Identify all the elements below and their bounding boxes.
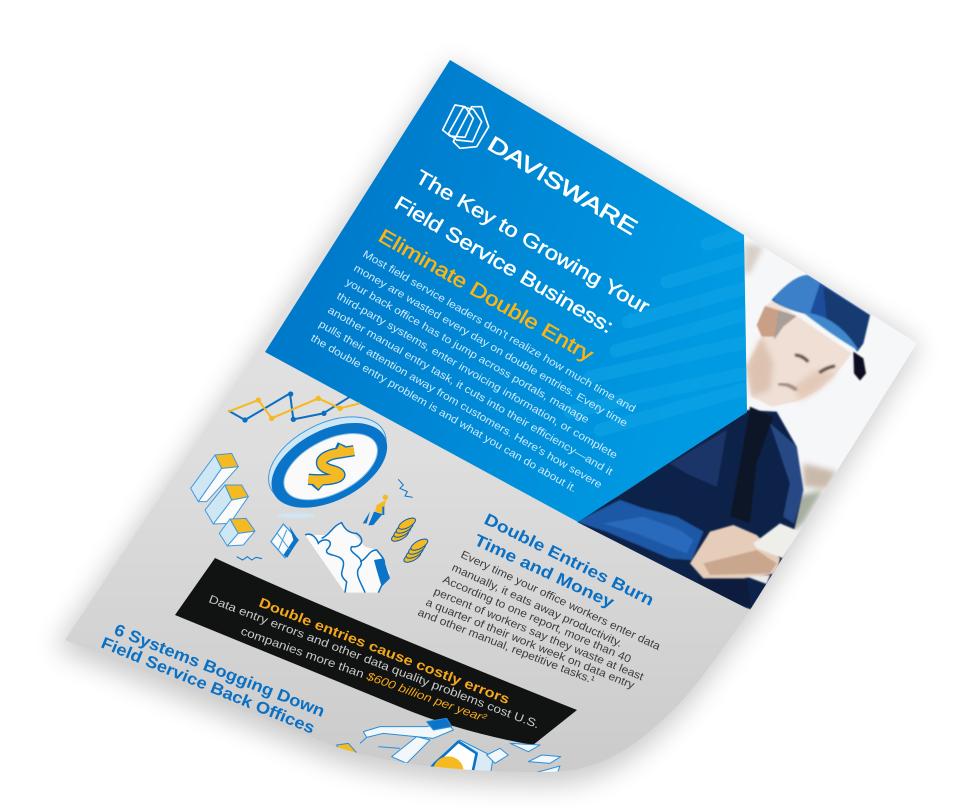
intro paragraph: money are wasted every day on double entries. Every time — [352, 262, 630, 430]
diamond icon — [271, 524, 298, 558]
section body: a quarter of their work week on data entry — [424, 597, 637, 692]
callout: costly errors: companies more than $600 billion per year² — [239, 626, 489, 725]
callout: costly errors — [175, 558, 577, 745]
blue header panel — [265, 60, 760, 522]
wave mountains — [305, 523, 390, 593]
line chart — [228, 391, 360, 423]
face — [746, 300, 852, 407]
title: Eliminate Double Entry — [374, 225, 597, 366]
section body: According to one report, more than 40 — [441, 574, 633, 666]
squiggles — [237, 479, 413, 560]
shadow under coin — [277, 513, 315, 518]
section body: percent of workers say they waste at least — [432, 586, 645, 683]
title: Field Service Business: — [390, 192, 617, 338]
callout: costly errors: Double entries cause costly errors — [257, 595, 512, 707]
section body — [416, 549, 663, 692]
illustration: back office systems — [336, 718, 562, 772]
sheet: document page — [65, 60, 930, 787]
intro paragraph: Most field service leaders don't realize how much time and — [360, 248, 638, 415]
section: double entries burn time and money — [416, 510, 663, 692]
intro paragraph: another manual entry task, it cuts into their efficiency—and it — [326, 304, 615, 478]
wordmark: DAVISWARE — [483, 132, 642, 240]
heading: 6 systems: 6 Systems Bogging Down — [112, 621, 327, 721]
section heading: Double Entries Burn — [481, 510, 657, 610]
intro paragraph: your back office has to jump across portals, manage — [344, 276, 591, 426]
section body: manually, it eats away productivity. — [450, 562, 624, 650]
sheet shadow — [55, 62, 920, 785]
callout: costly errors: Data entry errors and other data quality problems cost U.S. — [207, 594, 541, 731]
dollar sign — [308, 444, 354, 488]
section body: Every time your office workers enter data — [459, 549, 663, 653]
title — [374, 166, 653, 366]
coin stacks — [390, 516, 429, 565]
heading: 6 systems: Field Service Back Offices — [98, 634, 317, 738]
hand — [690, 523, 800, 584]
logo mark — [443, 105, 489, 148]
cap — [772, 275, 870, 381]
jacket and body — [570, 407, 803, 610]
intro paragraph — [308, 248, 638, 495]
illustration: coin, bars, chart — [191, 391, 429, 593]
phone — [753, 523, 800, 558]
sleeve — [577, 500, 703, 560]
intro paragraph: the double entry problem is and what you can do about it. — [308, 332, 579, 495]
photo: technician looking at phone — [570, 230, 930, 620]
section body: and other manual, repetitive tasks.¹ — [416, 607, 597, 687]
gray lower page background — [65, 60, 917, 772]
blurred background at lower right — [743, 243, 837, 537]
section heading — [471, 510, 657, 612]
section heading: Time and Money — [471, 531, 618, 612]
intro paragraph: third-party systems, enter invoicing information, or complete — [334, 290, 620, 462]
worker figure — [363, 495, 388, 525]
stacked bars — [191, 453, 255, 546]
decorative stripes — [570, 228, 760, 430]
title: The Key to Growing Your — [412, 166, 653, 319]
coin — [255, 399, 401, 525]
intro paragraph: pulls their attention away from customers. Here's how severe — [316, 318, 604, 491]
logo — [443, 105, 642, 240]
